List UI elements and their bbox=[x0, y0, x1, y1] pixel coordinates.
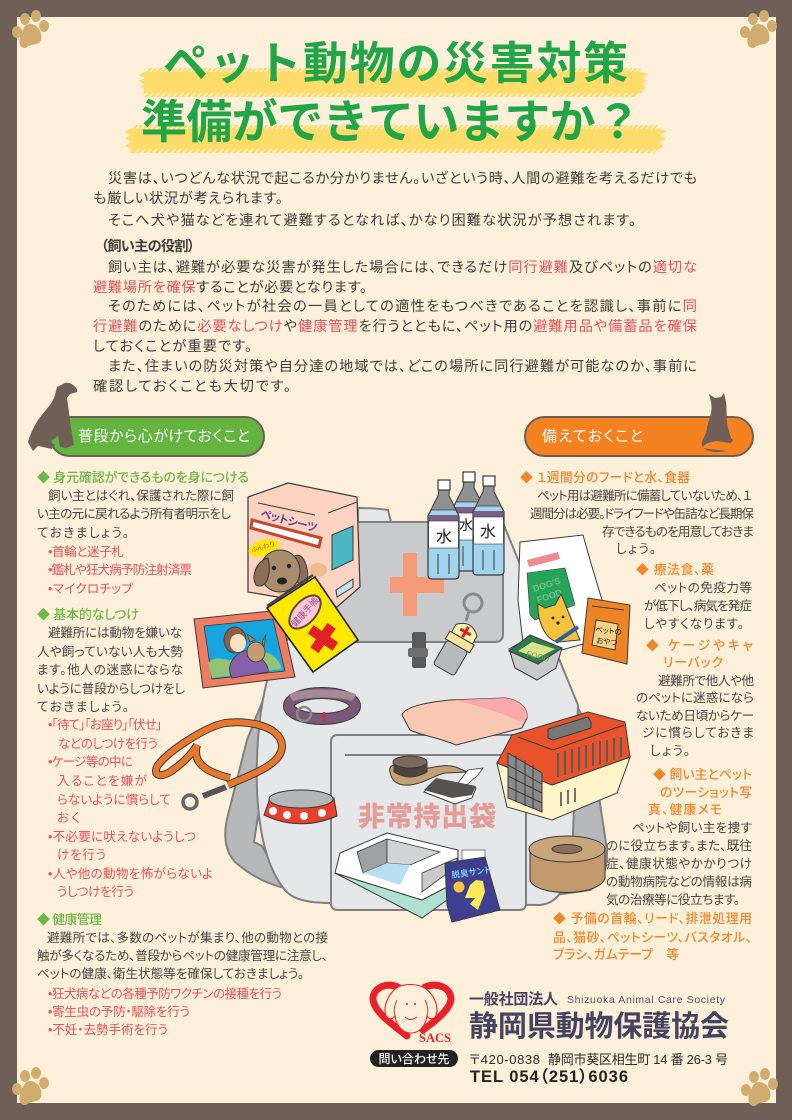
pet treats bag: おやつ bbox=[596, 636, 618, 647]
owner's role text: また、住まいの防災対策や自分達の地域では、どこの場所に同行避難が可能なのか、事前に bbox=[108, 358, 697, 375]
section: photo and health memo: ペットや飼い主を捜す bbox=[632, 821, 752, 835]
section: carrier: リーバック bbox=[663, 655, 723, 670]
water bottles: 水 bbox=[480, 523, 496, 541]
section: health management: ◆ 健康管理 bbox=[37, 912, 102, 927]
section: identification: •マイクロチップ bbox=[48, 582, 134, 596]
deodorizing sand bag bbox=[445, 857, 500, 922]
section: basic training: •人や他の動物を怖がらないよ bbox=[48, 866, 213, 881]
pet treats bag: ペットの bbox=[595, 625, 622, 637]
contact pill: 問い合わせ先 bbox=[379, 1051, 449, 1066]
section: basic training: いように普段からしつけをし bbox=[37, 682, 185, 696]
section: identification: ておきましょう。 bbox=[37, 526, 129, 540]
section: medicine: しやすくなります。 bbox=[644, 617, 744, 631]
heading pill: orange bbox=[525, 417, 753, 456]
section: basic training: •「待て」「お座り」「伏せ」 bbox=[48, 718, 162, 732]
owner's role text: 飼い主は、避難が必要な災害が発生した場合には、できるだけ同行避難及びペットの適切な bbox=[108, 259, 697, 276]
section: carrier: のペットに迷惑になら bbox=[636, 690, 754, 705]
section: spares: ◆ 予備の首輪、リード、排泄処理用 bbox=[553, 911, 752, 926]
pet sheets box bbox=[246, 483, 360, 607]
section: food and water: しょう。 bbox=[616, 542, 656, 556]
contact details: 静岡市葵区相生町 14 番 26-3 号 bbox=[548, 1052, 728, 1067]
section: basic training: おく bbox=[57, 811, 80, 825]
collar bbox=[289, 693, 355, 722]
section: carrier: ジに慣らしておきま bbox=[642, 725, 754, 740]
water bottles: 水 bbox=[459, 517, 473, 533]
section: health management: •寄生虫の予防・駆除を行う bbox=[48, 1004, 190, 1019]
left column: everyday preparation bbox=[37, 470, 328, 1037]
section: health management: •不妊・去勢手術を行う bbox=[48, 1022, 168, 1037]
section: spares bbox=[553, 911, 752, 962]
owner's role text: （飼い主の役割） bbox=[101, 238, 195, 255]
section: basic training: ておきましょう。 bbox=[37, 700, 129, 714]
section: carrier: ◆ ケージやキャ bbox=[646, 638, 753, 653]
grooming brushes bbox=[390, 756, 483, 804]
section: medicine: ペットの免疫力等 bbox=[654, 580, 752, 595]
section: spares: ブラシ、ガムテープ 等 bbox=[553, 947, 679, 962]
section: identification: ◆ 身元確認ができるものを身につける bbox=[37, 470, 249, 485]
section: photo and health memo: 気の治療等に役立ちます。 bbox=[606, 892, 740, 907]
section: basic training: ◆ 基本的なしつけ bbox=[37, 607, 139, 622]
food tray bbox=[509, 635, 562, 680]
section: basic training: などのしつけを行う bbox=[58, 737, 158, 751]
section: food and water: 存できるものを用意しておきま bbox=[602, 525, 754, 539]
leash bbox=[156, 722, 282, 809]
section: basic training: うしつけを行う bbox=[57, 885, 134, 899]
section: basic training: らないように慣らして bbox=[57, 792, 171, 807]
section: health management bbox=[37, 912, 328, 1037]
section: health management: ペットの健康、衛生状態等を確保しておきましょう。 bbox=[37, 966, 304, 981]
owner's role text: しておくことが重要です。 bbox=[93, 339, 252, 355]
organization logo: SACS bbox=[419, 1031, 451, 1045]
right column: items to prepare bbox=[520, 470, 754, 962]
heading pill: orange: 備えておくこと bbox=[542, 428, 643, 445]
section: medicine bbox=[636, 562, 752, 631]
section: health management: 触が多くなるため、普段からペットの健康管理に注意し、 bbox=[37, 949, 328, 963]
illustration: emergency bag with items bbox=[156, 472, 630, 922]
section: photo and health memo: 症、健康状態やかかりつけ bbox=[606, 857, 752, 871]
section: carrier: 避難所で他人や他 bbox=[658, 674, 754, 688]
title bbox=[124, 27, 667, 153]
owner's role text: 行避難のために必要なしつけや健康管理を行うとともに、ペット用の避難用品や備蓄品を確保 bbox=[93, 318, 697, 335]
capsule tag bbox=[431, 594, 482, 677]
section: food and water bbox=[520, 470, 754, 556]
pet sheets box: ふんわり bbox=[250, 540, 276, 554]
section: basic training bbox=[37, 607, 213, 899]
section: photo and health memo: のに役立ちます。また、既往 bbox=[606, 839, 752, 853]
towel bbox=[402, 698, 527, 745]
section: photo and health memo bbox=[606, 767, 752, 907]
contact details: TEL 054（251）6036 bbox=[470, 1067, 628, 1086]
section: basic training: •不必要に吠えないようしつ bbox=[48, 830, 196, 844]
section: identification: い主の元に戻れるよう所有者明示をし bbox=[37, 507, 231, 521]
section: photo and health memo: ◆ 飼い主とペット bbox=[653, 767, 752, 782]
intro text bbox=[93, 170, 697, 229]
heading pill: green: 普段から心がけておくこと bbox=[78, 428, 250, 445]
icon: paw top right bbox=[740, 10, 777, 48]
section: identification bbox=[37, 470, 249, 596]
section: photo and health memo: の動物病院などの情報は病 bbox=[606, 875, 752, 889]
section: basic training: 入ることを嫌が bbox=[57, 774, 148, 788]
deodorizing sand bag: 脱臭サンド bbox=[451, 864, 492, 880]
section: health management: 避難所では、多数のペットが集まり、他の動物との接 bbox=[47, 930, 328, 945]
organization name: 一般社団法人 bbox=[469, 990, 558, 1008]
dog food bag bbox=[518, 535, 602, 660]
pet sheets box: ペットシーツ bbox=[259, 508, 319, 535]
icon: paw bottom right bbox=[741, 1068, 778, 1106]
section: identification: •鑑札や狂犬病予防注射済票 bbox=[48, 562, 192, 577]
section: food and water: ◆ １週間分のフードと水、食器 bbox=[520, 470, 690, 485]
icon: paw top left bbox=[12, 10, 49, 48]
section: spares: 品、猫砂、ペットシーツ、バスタオル、 bbox=[553, 930, 752, 945]
owner's role text: 避難場所を確保することが必要となります。 bbox=[93, 279, 367, 296]
heading pill: green bbox=[50, 417, 264, 456]
owner's role text bbox=[93, 238, 697, 395]
pet bowl bbox=[264, 790, 337, 824]
dog food bag: FOOD bbox=[536, 587, 564, 605]
title: 準備ができていますか？ bbox=[141, 86, 641, 152]
bag front pocket: 非常持出袋 bbox=[358, 795, 496, 834]
intro text: 災害は、いつどんな状況で起こるか分かりません。いざという時、人間の避難を考えるだけでも bbox=[108, 170, 697, 187]
section: food and water: ペット用は避難所に備蓄していないため、１ bbox=[537, 489, 752, 503]
section: medicine: ◆ 療法食、薬 bbox=[636, 562, 714, 577]
section: photo and health memo: 真、健康メモ bbox=[648, 802, 722, 817]
icon: paw bottom left bbox=[12, 1067, 49, 1105]
section: basic training: 避難所には動物を嫌いな bbox=[48, 626, 182, 640]
organization name: 静岡県動物保護協会 bbox=[469, 1010, 729, 1043]
section: basic training: けを行う bbox=[57, 848, 106, 862]
contact details: 〒420-0838 bbox=[469, 1052, 540, 1067]
section: carrier: しょう。 bbox=[650, 744, 690, 758]
pet health handbook: 健康手帳 bbox=[288, 595, 321, 629]
organization name bbox=[469, 990, 729, 1043]
contact pill bbox=[370, 1050, 458, 1067]
section: carrier bbox=[636, 638, 754, 758]
organization name: Shizuoka Animal Care Society bbox=[567, 994, 726, 1006]
section: identification: 飼い主とはぐれ、保護された際に飼 bbox=[48, 489, 234, 503]
section: medicine: が低下し、病気を発症 bbox=[644, 598, 752, 613]
icon: dog silhouette bbox=[28, 383, 77, 451]
section: basic training: 人や飼っていない人も大勢 bbox=[37, 645, 183, 659]
food tray: FOOD bbox=[525, 649, 550, 664]
cat litter tray bbox=[335, 833, 485, 918]
pet health handbook bbox=[267, 575, 358, 672]
pet carrier bbox=[497, 712, 630, 820]
water bottles bbox=[428, 472, 504, 579]
section: photo and health memo: のツーショット写 bbox=[660, 785, 752, 800]
owner's role text: 確認しておくことも大切です。 bbox=[93, 379, 291, 395]
water bottles: 水 bbox=[436, 528, 452, 546]
section: basic training: ます。他人の迷惑にならな bbox=[37, 662, 183, 677]
section: health management: •狂犬病などの各種予防ワクチンの接種を行う bbox=[48, 986, 282, 1001]
icon: cat silhouette bbox=[702, 393, 733, 452]
owner's role text: そのためには、ペットが社会の一員としての適性をもつべきであることを認識し、事前に同 bbox=[108, 298, 697, 315]
bag front pocket bbox=[331, 735, 526, 910]
section: basic training: •ケージ等の中に bbox=[48, 754, 133, 769]
section: food and water: 週間分は必要。ドライフードや缶詰など長期保 bbox=[530, 506, 754, 521]
bag flap bbox=[330, 508, 503, 668]
dog food bag: DOG'S bbox=[532, 576, 562, 594]
packing tape roll bbox=[529, 836, 605, 893]
intro text: も厳しい状況が考えられます。 bbox=[93, 191, 283, 207]
intro text: そこへ犬や猫などを連れて避難するとなれば、かなり困難な状況が予想されます。 bbox=[108, 213, 636, 229]
title: ペット動物の災害対策 bbox=[163, 27, 628, 92]
organization logo bbox=[373, 984, 451, 1045]
contact details bbox=[469, 1052, 728, 1086]
photo of owner and dog bbox=[194, 610, 295, 688]
section: carrier: ないため日頃からケー bbox=[636, 709, 754, 723]
pet treats bag bbox=[582, 598, 630, 664]
bag straps bbox=[225, 695, 607, 895]
bag body bbox=[257, 522, 578, 905]
section: identification: •首輪と迷子札 bbox=[48, 545, 124, 559]
